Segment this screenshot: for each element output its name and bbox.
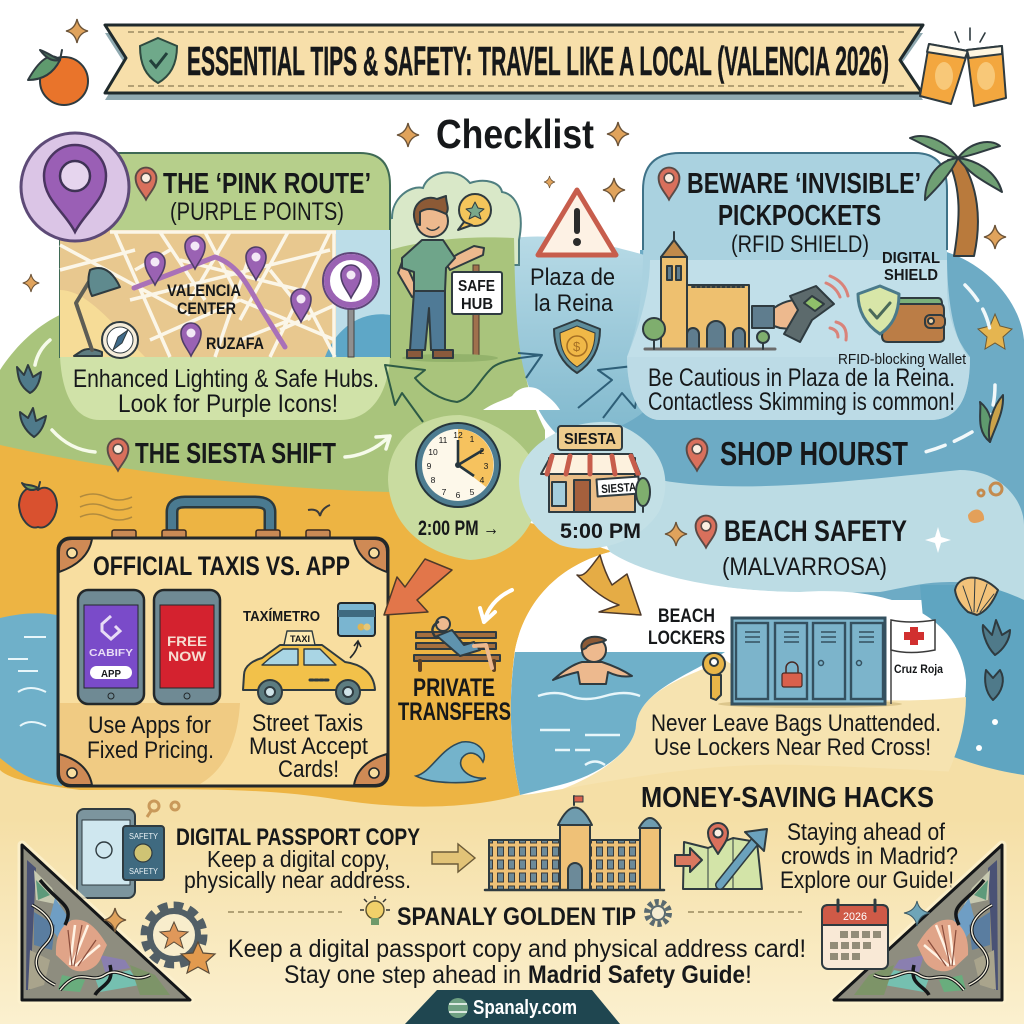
footer text: Spanaly.com	[473, 997, 577, 1019]
icon: clock: 3	[484, 461, 489, 471]
icon: taxi	[243, 631, 375, 704]
sign: safe hub: SAFE	[458, 278, 495, 295]
orange region	[0, 440, 613, 807]
icon: shield and wallet	[858, 286, 945, 342]
text: digital passport copy: DIGITAL PASSPORT COPY	[176, 824, 420, 851]
icon: phone and passport: SAFETY	[129, 867, 159, 876]
icon: lamp	[74, 268, 120, 356]
decor sparkle	[23, 274, 39, 292]
icon: shell	[955, 578, 998, 615]
star	[978, 314, 1012, 349]
heading: beach safety: (MALVARROSA)	[722, 553, 887, 581]
light blue blob: beach safety	[604, 470, 1024, 600]
rings decor	[978, 483, 1002, 496]
green hill	[390, 237, 525, 380]
heading pin	[136, 168, 156, 200]
icon: key	[703, 653, 725, 700]
white dashes left	[35, 340, 95, 452]
icon: taxi: TAXI	[290, 634, 310, 644]
locker shadow	[718, 700, 902, 708]
illustration: person with safe hub sign	[398, 194, 502, 362]
body text: Use Lockers Near Red Cross!	[654, 734, 931, 761]
icon: map with arrow	[675, 823, 767, 889]
sparkle white	[925, 527, 951, 553]
label: cruz roja: Cruz Roja	[894, 662, 943, 676]
heading: spanaly golden tip: SPANALY GOLDEN TIP	[397, 903, 636, 931]
green arrow	[385, 358, 520, 422]
text: golden tip body: Madrid Safety Guide	[528, 961, 745, 989]
heading: BEWARE ‘INVISIBLE’	[687, 168, 921, 200]
caption: street taxis: Street Taxis	[252, 710, 363, 737]
small arrow	[350, 641, 361, 658]
sea	[511, 652, 725, 795]
green region	[0, 238, 545, 492]
label: digital shield	[882, 250, 940, 284]
icon: person on bench	[414, 617, 500, 670]
icon: wave	[416, 742, 486, 783]
caption: apps: Use Apps for	[88, 712, 211, 739]
icon: clock	[416, 423, 500, 507]
decorative diamond	[904, 901, 930, 926]
right blue column	[920, 585, 1024, 775]
subheading: (RFID SHIELD)	[731, 231, 869, 258]
text: plaza de la reina: la Reina	[534, 290, 614, 317]
icon: phone and passport	[77, 809, 164, 898]
icon: lightbulb	[360, 896, 390, 925]
white road arrow right	[925, 285, 995, 452]
star bubble	[458, 194, 491, 230]
body text: Enhanced Lighting & Safe Hubs.	[73, 365, 379, 393]
heading: beach safety: BEACH SAFETY	[724, 515, 907, 548]
divider golden tip	[228, 896, 802, 931]
icon: red cross flag	[891, 620, 935, 704]
icon: left corner ornament	[22, 845, 190, 1000]
heading	[687, 168, 921, 232]
icon: clock: 6	[456, 490, 461, 500]
icon: orange	[28, 50, 88, 105]
wavy lines	[80, 494, 132, 520]
icon: palm tree	[910, 136, 1002, 256]
icon: siesta shop	[541, 426, 650, 512]
cloud behind person	[364, 172, 521, 265]
text: madrid guide: Staying ahead of	[787, 819, 945, 846]
blob: clock	[388, 415, 540, 560]
decorative diamond	[104, 908, 126, 932]
icon: coin shield: $	[573, 339, 581, 354]
icon: phone and passport: SAFETY	[129, 832, 159, 841]
heading: OFFICIAL TAXIS VS. APP	[93, 551, 350, 581]
body text	[651, 710, 941, 761]
icon: globe	[448, 998, 468, 1018]
arrow to siesta	[345, 436, 390, 457]
label: private transfers: PRIVATE	[413, 674, 495, 702]
body text	[648, 364, 955, 416]
caption: street taxis	[249, 710, 368, 783]
corners	[59, 539, 387, 785]
text: madrid guide: crowds in Madrid?	[781, 843, 958, 870]
heading: money-saving hacks: MONEY-SAVING HACKS	[641, 782, 934, 814]
heading: Checklist: Checklist	[436, 111, 594, 157]
sign: safe hub: HUB	[461, 296, 493, 313]
warning sign	[538, 190, 616, 255]
plant	[980, 395, 1003, 442]
icon: apple	[19, 482, 57, 528]
label: rfid wallet: RFID-blocking Wallet	[838, 351, 967, 368]
text: digital passport copy: Keep a digital copy,	[207, 846, 390, 872]
icon: siesta shop: SIESTA	[564, 431, 616, 448]
icon: clock: 1	[470, 434, 475, 444]
handle	[172, 502, 270, 538]
icon: clock: 8	[431, 475, 436, 485]
body text: Contactless Skimming is common!	[648, 388, 955, 416]
body text: Be Cautious in Plaza de la Reina.	[648, 364, 955, 392]
text: plaza de la reina: Plaza de	[530, 264, 615, 291]
white arrow	[480, 590, 512, 622]
heading: PICKPOCKETS	[718, 200, 881, 232]
icon: clock: 12	[453, 430, 463, 440]
icon: cathedral	[643, 232, 775, 349]
heading: siesta shift	[108, 438, 336, 471]
caption: street taxis: Must Accept	[249, 733, 368, 760]
caption: street taxis: Cards!	[278, 756, 339, 783]
label: 5:00 pm: 5:00 PM	[560, 520, 641, 543]
caption: apps	[87, 712, 214, 764]
subheading: (PURPLE POINTS)	[170, 198, 344, 226]
icon: clock: 5	[470, 487, 475, 497]
text: digital passport copy: physically near address.	[184, 867, 411, 893]
text: madrid guide	[780, 819, 958, 894]
cream bottom area	[0, 750, 1024, 1024]
heading pin	[659, 168, 679, 200]
small magnifier icons	[147, 801, 179, 817]
white dots	[976, 719, 998, 751]
beach scene	[538, 606, 943, 765]
decorative diamond	[984, 225, 1006, 249]
icon: clock: 7	[442, 487, 447, 497]
icon: big purple pin	[21, 133, 129, 241]
icon: compass	[102, 322, 138, 358]
icon: card	[338, 603, 375, 636]
phone: cabify: CABIFY	[89, 648, 133, 659]
title banner	[105, 25, 923, 100]
leaves left	[17, 365, 46, 437]
label: beach lockers: BEACH	[658, 606, 715, 627]
sign: safe hub	[452, 272, 502, 314]
text: digital passport copy	[176, 824, 420, 893]
orange arrow	[384, 559, 452, 615]
heading: shop hours: SHOP HOURST	[720, 435, 908, 472]
phone: cabify: APP	[101, 669, 121, 680]
label: beach lockers	[648, 606, 725, 649]
label: private transfers	[398, 674, 511, 726]
purple route	[134, 257, 285, 347]
icon: clinking glasses	[920, 28, 1006, 106]
cream band over beach edge	[520, 765, 1024, 818]
bird	[308, 505, 330, 516]
left sea	[0, 613, 62, 786]
phone: free now: NOW	[168, 648, 207, 664]
icon: clock: 11	[439, 435, 448, 445]
icon: sparkle	[66, 19, 88, 43]
icon: hand skimmer	[752, 276, 848, 342]
panel: suitcase	[58, 502, 388, 786]
caption: apps: Fixed Pricing.	[87, 737, 214, 764]
map labels: VALENCIA	[167, 281, 241, 300]
icon: siesta shop: SIESTA	[601, 480, 637, 496]
phone: cabify	[78, 590, 144, 704]
text: golden tip body	[228, 935, 806, 989]
text: plaza de la reina	[530, 264, 615, 317]
cloud	[483, 387, 560, 410]
icon: small gear	[647, 902, 669, 924]
text: golden tip body: !	[745, 961, 752, 989]
icon: lockers	[732, 618, 885, 704]
icon: palace	[485, 796, 664, 890]
body text: Look for Purple Icons!	[118, 390, 338, 418]
blue region	[560, 250, 1024, 600]
icon: right corner ornament	[834, 845, 1002, 1000]
panel: pink route	[60, 153, 390, 420]
icon: calendar	[822, 900, 888, 969]
map: RUZAFA	[206, 334, 264, 353]
blue arrows	[518, 353, 642, 418]
panel: rfid pickpockets	[627, 153, 970, 420]
sand	[560, 660, 966, 790]
body text	[73, 365, 379, 418]
icon: clock: 10	[428, 447, 438, 457]
shell decor	[968, 510, 984, 523]
icon: clock: 2	[480, 446, 485, 456]
arrow	[432, 844, 475, 872]
map	[60, 230, 390, 358]
icon: coin shield	[554, 320, 600, 373]
heading: beach safety	[665, 515, 907, 581]
waves	[538, 693, 640, 765]
label: 2:00 pm: 2:00 PM →	[418, 517, 499, 540]
beach white area	[511, 552, 966, 795]
gold arrow	[577, 555, 641, 615]
phone: free now	[154, 590, 220, 704]
text: golden tip body: Keep a digital passport copy and physical address card!	[228, 935, 806, 963]
text: golden tip body: Stay one step ahead in	[284, 961, 521, 989]
left sea ripples	[8, 637, 46, 726]
sparkle	[603, 178, 625, 202]
footer tab	[405, 990, 620, 1024]
label: private transfers: TRANSFERS	[398, 698, 511, 726]
icon: clock: 4	[480, 475, 485, 485]
map: CENTER	[177, 299, 236, 318]
icon: shield check	[140, 38, 177, 83]
phone: free now: FREE	[167, 633, 207, 649]
icon: purple signpost	[323, 253, 379, 357]
label: taximetro: TAXÍMETRO	[243, 608, 320, 625]
icon: blue leaves	[983, 620, 1010, 700]
label: digital shield: DIGITAL	[882, 250, 940, 267]
icon: swimmer	[553, 637, 632, 684]
label: beach lockers: LOCKERS	[648, 628, 725, 649]
icon: gear with stars	[146, 907, 215, 973]
label: digital shield: SHIELD	[884, 267, 938, 284]
blob: shop	[519, 422, 665, 549]
icon: clock: 9	[427, 461, 432, 471]
heading: shop hours	[687, 435, 908, 472]
body text: Never Leave Bags Unattended.	[651, 710, 941, 737]
sparkle	[544, 176, 555, 188]
icon: calendar: 2026	[843, 911, 867, 923]
text: madrid guide: Explore our Guide!	[780, 867, 954, 894]
heading: siesta shift: THE SIESTA SHIFT	[135, 438, 336, 470]
pale blue plaza area	[513, 236, 655, 440]
heading: the pink route: THE ‘PINK ROUTE’	[163, 168, 371, 200]
